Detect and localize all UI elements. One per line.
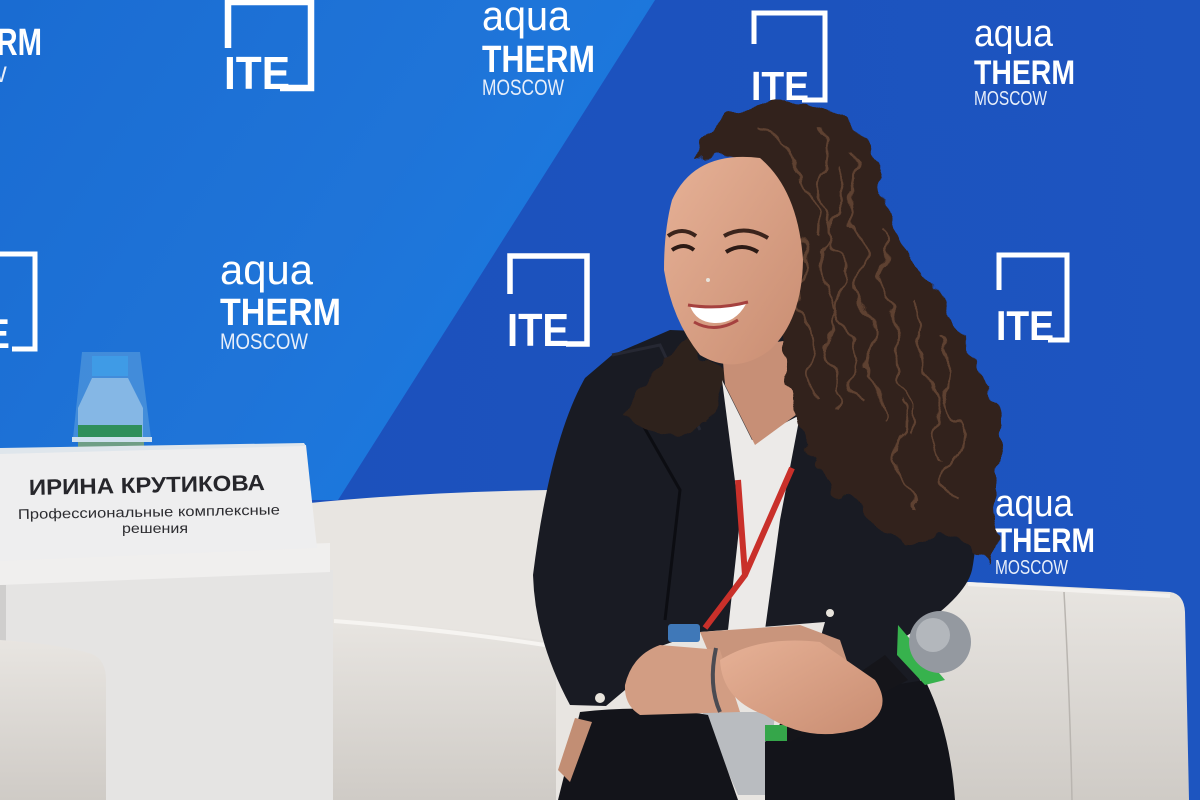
logo: ITE top centre right: ITE xyxy=(751,63,809,109)
logo: Aquatherm centre left: MOSCOW xyxy=(220,329,308,354)
logo: Aquatherm lower right: THERM xyxy=(995,522,1095,560)
name card: ИРИНА КРУТИКОВА xyxy=(29,470,265,500)
logo: ITE top left xyxy=(224,0,311,99)
logo: ITE top centre right xyxy=(751,13,825,109)
logo: Aquatherm cropped top left xyxy=(0,22,42,87)
logo: Aquatherm top right: THERM xyxy=(974,54,1075,92)
logo: Aquatherm top right xyxy=(974,13,1075,110)
logo: ITE cropped left xyxy=(0,254,35,357)
face xyxy=(664,157,803,364)
logo: Aquatherm top right: MOSCOW xyxy=(974,88,1047,110)
logo: Aquatherm lower right xyxy=(995,483,1095,579)
logo: Aquatherm centre left xyxy=(220,246,341,354)
shirt xyxy=(722,380,800,630)
logo: ITE right xyxy=(996,255,1067,349)
name card: решения xyxy=(122,520,188,536)
logo: Aquatherm top centre: THERM xyxy=(482,39,595,81)
microphone xyxy=(765,611,971,742)
hair over shoulder xyxy=(625,335,725,431)
hair main mass xyxy=(695,100,1004,565)
logo: Aquatherm centre left: THERM xyxy=(220,292,341,334)
logo: Aquatherm top centre xyxy=(482,0,595,100)
jacket xyxy=(533,330,977,710)
pants and shirt hem xyxy=(558,680,955,800)
sofa: centre arm xyxy=(332,618,556,800)
logo: Aquatherm lower right: MOSCOW xyxy=(995,557,1068,579)
hair curls xyxy=(760,125,961,510)
water bottle in glass xyxy=(72,352,152,448)
neck xyxy=(722,340,800,445)
name card: Профессиональные комплексные xyxy=(18,501,280,522)
logo: ITE centre: ITE xyxy=(507,304,569,356)
logo: Aquatherm lower right: aqua xyxy=(995,483,1074,525)
logo: ITE top left: ITE xyxy=(224,47,290,99)
logo: Aquatherm top centre: MOSCOW xyxy=(482,75,564,100)
side table xyxy=(0,543,333,800)
lanyard xyxy=(705,468,792,628)
logo: ITE right: ITE xyxy=(996,302,1054,349)
sofa: backrest and right arm xyxy=(310,490,1189,800)
person xyxy=(533,100,1004,800)
logo: Aquatherm centre left: aqua xyxy=(220,246,314,293)
forearms and hands xyxy=(558,624,883,782)
name card xyxy=(0,443,317,561)
logo: ITE centre xyxy=(507,256,587,356)
logo: Aquatherm top right: aqua xyxy=(974,13,1054,55)
sofa: left arm in front of table xyxy=(0,640,106,800)
